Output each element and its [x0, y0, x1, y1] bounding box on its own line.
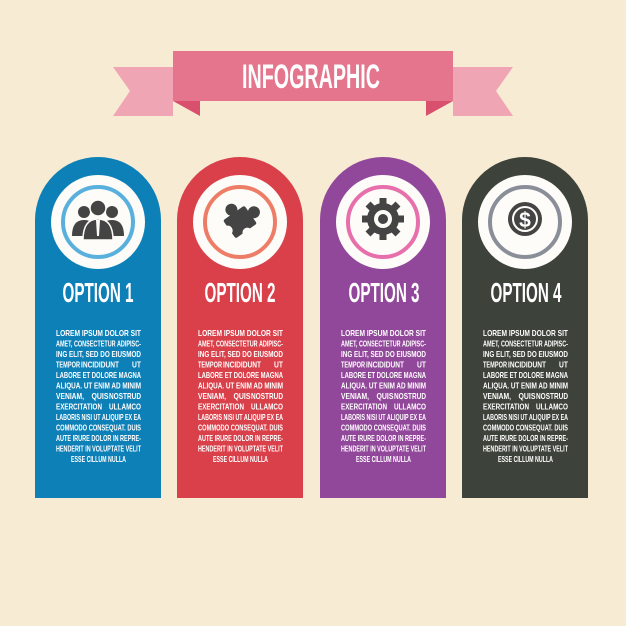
- text block: option 3: [341, 328, 427, 464]
- text block: option 4: [483, 328, 569, 464]
- icon: dollar coin: $: [519, 209, 531, 232]
- heading: OPTION 3: [348, 277, 420, 308]
- text block: option 2: [198, 328, 284, 464]
- heading: OPTION 2: [204, 277, 276, 308]
- panel: option 1: [35, 157, 161, 498]
- text block: option 1: [56, 328, 142, 464]
- title: INFOGRAPHIC: [242, 58, 380, 96]
- panel: option 3: [320, 157, 446, 498]
- icon: dollar coin: [508, 202, 542, 236]
- heading: OPTION 1: [62, 277, 134, 308]
- icon: team: [72, 200, 124, 240]
- icon: puzzle: [212, 192, 269, 248]
- icon: gear: [362, 198, 404, 240]
- ribbon banner: [113, 51, 513, 116]
- panel: option 2: [177, 157, 303, 498]
- heading: OPTION 4: [490, 277, 562, 308]
- panel: option 4: [462, 157, 588, 498]
